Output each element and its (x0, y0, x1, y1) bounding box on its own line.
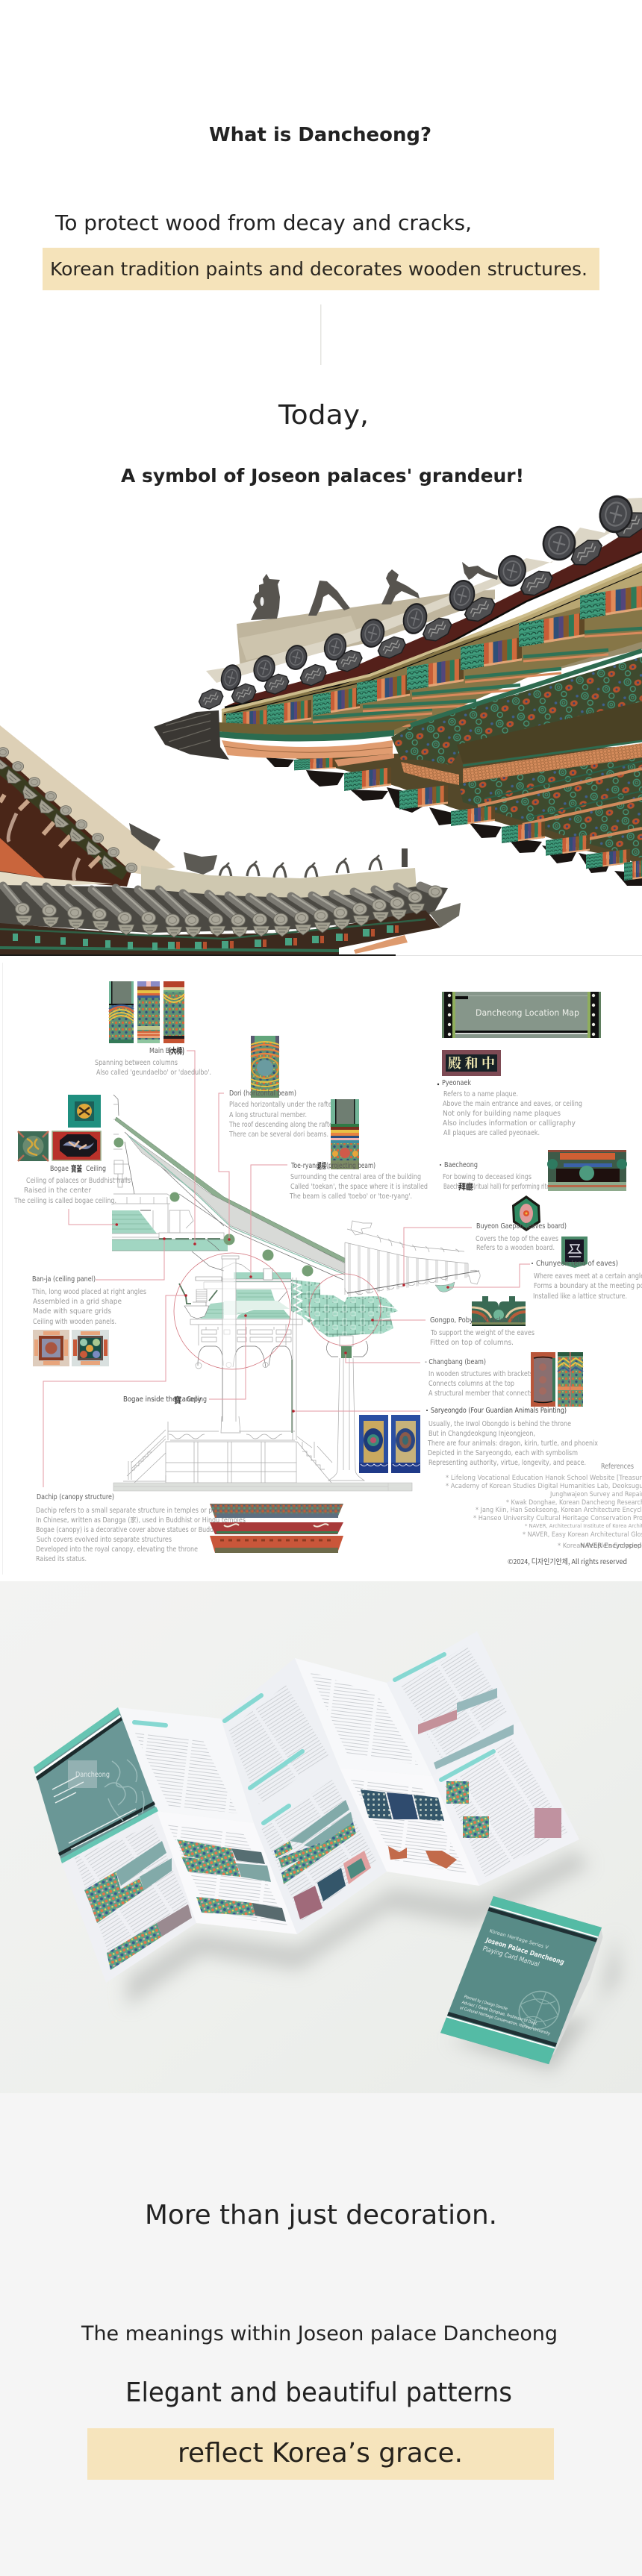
upper right roof (154, 493, 642, 886)
text: bogae inside canopy: Ceiling (187, 1395, 207, 1404)
text: bogae ceiling: Bogae (50, 1165, 69, 1173)
ridge plaster and ornaments (129, 823, 417, 904)
text: dori: A long structural member. (229, 1111, 307, 1119)
tile row (196, 493, 642, 712)
highlight callout: grace (87, 2428, 554, 2480)
card box: manual cover: Advisor | Gwak Donghae, Professor of Dept. (461, 2001, 538, 2027)
callout circles (174, 1253, 381, 1369)
text: pyeonaek: Pyeonaek (442, 1079, 471, 1087)
card box: manual cover: Playing Card Manual (482, 1945, 540, 1969)
text: bogae ceiling (13, 1163, 131, 1205)
dragon-head roof end (154, 710, 229, 760)
text: toe-ryang (289, 1160, 428, 1201)
text: dori: Placed horizontally under the rafters (229, 1101, 337, 1109)
dachip canopy swatches (210, 1504, 343, 1553)
leaflet cover (34, 1707, 158, 1863)
text: main beam: (大樑) (169, 1045, 184, 1057)
closing subheading: The meanings within Joseon palace Dancheong (81, 2322, 558, 2345)
text: baecheong: Baecheong (ritual hall) for performing rites (443, 1183, 552, 1191)
text: ban-ja: Thin, long wood placed at right angles (31, 1288, 146, 1296)
references: References (601, 1463, 634, 1471)
base plinth (113, 1483, 412, 1491)
chunyeon pattern swatch (561, 1237, 588, 1268)
pattern illustrations (84, 1688, 561, 1970)
text: ban-ja: Ceiling with wooden panels. (33, 1318, 116, 1326)
text: bogae ceiling: Raised in the center (24, 1187, 91, 1195)
leaflet cover: Dancheong (75, 1771, 110, 1779)
title: What is Dancheong? (209, 124, 431, 146)
baecheong photo (547, 1150, 627, 1191)
text: saryeongdo: Depicted in the Saryeongdo, each with symbolism (428, 1449, 578, 1457)
text: dori: The roof descending along the rafters (228, 1121, 338, 1129)
text: bogae inside canopy: Bogae inside the canopy (123, 1395, 202, 1404)
card box: manual cover (440, 1896, 609, 2066)
text: pyeonaek (437, 1079, 582, 1137)
text: buyeon gaepan: Buyeon Gaepan (eaves board) (476, 1222, 567, 1231)
toe-ryang pattern swatch (331, 1099, 359, 1169)
text: toe-ryang: 退樑 (317, 1160, 326, 1172)
lower rafter ends (294, 757, 642, 881)
building elevation drawing (112, 1095, 480, 1491)
folded paper facets (62, 1631, 579, 1983)
text: pyeonaek: Above the main entrance and eaves, or ceiling (443, 1100, 582, 1108)
text: toe-ryang: (projecting beam) (326, 1162, 375, 1170)
text: changbang: Connects columns at the top (428, 1380, 514, 1388)
orange under-eave beam (219, 730, 394, 742)
text: dachip: In Chinese, written as Dangga (家), used in Buddhist or Hindu temples (36, 1516, 246, 1525)
photo: folding leaflet and playing cards (0, 1581, 642, 2093)
teal stripes left (112, 1210, 157, 1234)
green roof strip (115, 1117, 345, 1263)
text: dachip: Bogae (canopy) is a decorative cover above statues or Buddhas (36, 1526, 224, 1534)
card box: manual cover: Korean Heritage Series V (489, 1928, 549, 1951)
text: ban-ja (31, 1275, 146, 1326)
lower tile ends (15, 886, 442, 937)
card box: manual cover: Joseon Palace Dancheong (484, 1937, 565, 1966)
text: bogae ceiling: 寶蓋 (71, 1163, 82, 1175)
closing statement line: Elegant and beautiful patterns (125, 2378, 512, 2408)
gray roof band (127, 1134, 345, 1273)
subheading: symbol of grandeur: A symbol of Joseon palaces' grandeur! (121, 465, 524, 487)
text: ban-ja: Ban-ja (ceiling panel) (32, 1275, 96, 1284)
dark red band and black line (225, 522, 642, 707)
text: main beam (95, 1045, 211, 1077)
card box: manual cover: of Cultural Heritage Conservation, Hanseo University (459, 2006, 551, 2036)
teal bracket cluster (291, 1280, 398, 1337)
text: toe-ryang: Surrounding the central area of the building (290, 1173, 421, 1181)
gongpo swatch (472, 1296, 526, 1326)
heading banner: Dancheong Location Map (442, 992, 601, 1038)
saryeongdo paintings (359, 1415, 420, 1473)
gable underside (0, 752, 131, 887)
main beam pattern swatches (109, 981, 184, 1043)
card box: manual cover: Planned by | Design Danche (463, 1995, 508, 2012)
text: main beam: Main Beam (149, 1047, 183, 1055)
body text lines (75, 1645, 567, 1963)
closing heading: More than just decoration. (145, 2200, 497, 2230)
structure markers (113, 1137, 314, 1276)
text: saryeongdo: Usually, the Irwol Obongdo is behind the throne (428, 1420, 571, 1428)
text: dori: There can be several dori beams. (228, 1131, 328, 1139)
text: changbang: In wooden structures with brackets (428, 1370, 533, 1378)
text: dachip: Developed into the royal canopy, elevating the throne (36, 1545, 198, 1554)
green bracket square (341, 1346, 352, 1358)
teal floor (112, 1239, 228, 1251)
photo: palace eaves (0, 493, 642, 956)
text: pyeonaek: Refers to a name plaque. (443, 1090, 518, 1098)
text: chunyeon (532, 1260, 642, 1301)
highlight callout: grace: reflect Korea’s grace. (178, 2438, 463, 2469)
text: main beam: Spanning between columns (95, 1059, 178, 1067)
panel: Dancheong location map (0, 955, 642, 1581)
pyeonaek plaque image: 殿和中 (448, 1053, 495, 1072)
rafter ends (226, 585, 642, 733)
closing section background (0, 2093, 642, 2576)
railing and arches (190, 1319, 302, 1345)
text: pyeonaek: Not only for building name plaques (443, 1110, 561, 1118)
intro sentence: To protect wood from decay and cracks, (54, 210, 472, 235)
text: bogae ceiling: The ceiling is called bogae ceiling. (13, 1197, 116, 1205)
text: dachip (36, 1493, 246, 1563)
text: saryeongdo: Saryeongdo (Four Guardian Animals Painting) (431, 1407, 567, 1415)
text: dachip: Raised its status. (36, 1555, 87, 1563)
text: bogae inside canopy: 寶 (174, 1394, 181, 1406)
text: ban-ja: Assembled in a grid shape (33, 1298, 122, 1306)
rafter lines (272, 628, 642, 725)
left high structure (113, 1095, 343, 1280)
text: pyeonaek: Also includes information or calligraphy (443, 1119, 576, 1128)
text: gongpo: Gongpo, Pobyuk (bracket set) (430, 1316, 523, 1325)
painted beam (391, 657, 642, 765)
text: dachip: Dachip refers to a small separate structure in temples or palaces (36, 1507, 231, 1515)
text: baecheong: For bowing to deceased kings (443, 1173, 532, 1181)
statues (251, 562, 498, 620)
text: gongpo: Fitted on top of columns. (430, 1339, 514, 1347)
columns (222, 1259, 236, 1422)
text: changbang (425, 1358, 533, 1398)
stone platform (166, 1422, 296, 1483)
heading banner: Dancheong Location Map: Dancheong Location Map (476, 1007, 579, 1018)
text: baecheong: Baecheong (444, 1161, 478, 1169)
bogae ceiling swatches (18, 1095, 101, 1161)
text: changbang: - Changbang (beam) (425, 1358, 486, 1366)
highlight callout: tradition: Korean tradition paints and decorates wooden structures. (50, 258, 588, 280)
text: dachip: Such covers evolved into separate structures (37, 1536, 172, 1544)
leaflet (34, 1631, 579, 1983)
text: saryeongdo: There are four animals: dragon, kirin, turtle, and phoenix (427, 1439, 598, 1448)
lower left roof (0, 725, 461, 955)
changbang swatches (531, 1352, 583, 1407)
text: gongpo (430, 1316, 535, 1347)
text: baecheong (440, 1161, 552, 1192)
text: changbang: A structural member that connects (428, 1389, 533, 1398)
text: chunyeon: Installed like a lattice structure. (533, 1292, 627, 1301)
scalloped shadows (266, 757, 642, 886)
shadow (127, 1851, 590, 2007)
lower eave band (0, 910, 440, 955)
tile barrels (0, 884, 448, 933)
soffit (222, 563, 642, 741)
text: buyeon gaepan (476, 1222, 567, 1252)
dori pattern swatch (251, 1036, 279, 1098)
central teal roof (234, 1272, 291, 1282)
references (446, 1463, 642, 1566)
text: chunyeon: Chunyeon (end of eaves) (536, 1260, 618, 1268)
heading: today: Today, (278, 400, 369, 431)
page background top (0, 0, 642, 1581)
gable tile ends (0, 748, 137, 874)
ban-ja swatches (33, 1330, 109, 1366)
leader lines (43, 1051, 530, 1487)
text: dori (228, 1090, 338, 1139)
text: dachip: Dachip (canopy structure) (37, 1493, 114, 1501)
icon: buyeon gaepan emblem (512, 1195, 540, 1231)
text: pyeonaek: All plaques are called pyeonaek. (443, 1129, 540, 1137)
text: bogae ceiling: Ceiling of palaces or Buddhist halls (26, 1177, 131, 1185)
references: ©2024, 디자인기안체, All rights reserved (508, 1556, 627, 1566)
highlight callout: tradition (43, 248, 599, 290)
text: saryeongdo: Representing authority, virtue, longevity, and peace. (428, 1459, 586, 1467)
body (294, 746, 642, 866)
text: buyeon gaepan: Refers to a wooden board. (476, 1244, 555, 1252)
text: toe-ryang: Toe-ryang (290, 1162, 320, 1170)
plaster ridge (237, 590, 495, 669)
text: bogae inside canopy (123, 1394, 207, 1406)
text: main beam: Also called 'geundaelbo' or 'daedulbo'. (96, 1069, 211, 1077)
text: dori: Dori (horizontal beam) (229, 1090, 296, 1098)
pyeonaek plaque image (442, 1050, 501, 1076)
text: bogae ceiling: Ceiling (86, 1165, 106, 1173)
text: ban-ja: Made with square grids (33, 1307, 111, 1316)
gable plaster (0, 725, 175, 875)
text: saryeongdo (426, 1407, 598, 1467)
text: toe-ryang: Called 'toekan', the space where it is installed (290, 1183, 428, 1191)
pill headings (134, 1654, 493, 1823)
text: gongpo: To support the weight of the eaves (430, 1329, 535, 1337)
right roof tiles (345, 1242, 468, 1297)
text: saryeongdo: But in Changdeokgung Injeongjeon, (428, 1430, 535, 1438)
text: buyeon gaepan: Covers the top of the eaves (476, 1235, 558, 1243)
text: baecheong: 拜廳 (458, 1181, 473, 1192)
text: toe-ryang: The beam is called 'toebo' or 'toe-ryang'. (289, 1192, 412, 1201)
